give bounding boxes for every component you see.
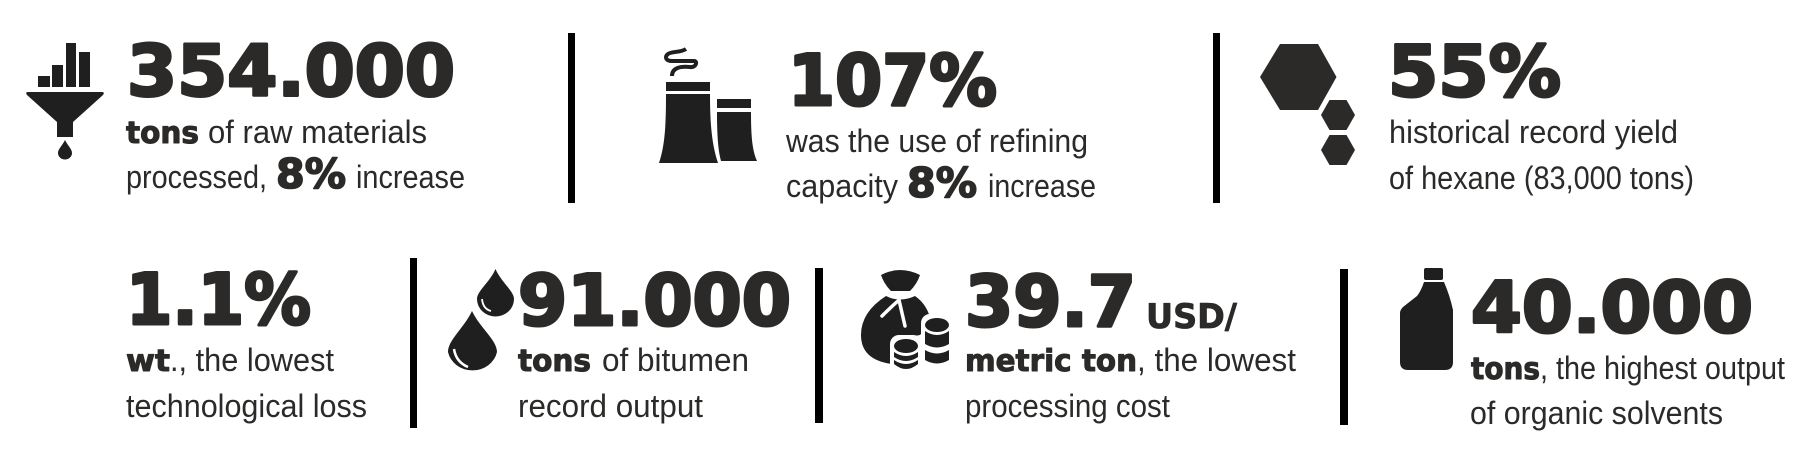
text: metric ton, the lowest processing cost [965, 342, 1296, 424]
text: was the use of refining capacity 8% increase: capacity [786, 168, 898, 204]
text: metric ton, the lowest processing cost: , the lowest [1137, 342, 1296, 378]
panel: technological loss [126, 259, 367, 424]
text: wt., the lowest technological loss [126, 342, 367, 424]
icon: money bag and coins [861, 270, 953, 372]
text: tons of raw materials processed, 8% increase: tons [126, 116, 199, 151]
text: was the use of refining capacity 8% increase: 8% [907, 159, 977, 207]
panel: hexane yield [1260, 31, 1694, 196]
text: tons of bitumen record output: tons [518, 344, 591, 379]
number: 107%: 107% [788, 40, 997, 122]
panel: refining capacity use [659, 40, 1096, 207]
number: 39.7: 39.7 [965, 261, 1136, 343]
text: tons, the highest output of organic solvents: tons [1471, 352, 1540, 387]
text: tons, the highest output of organic solvents: of organic solvents [1470, 395, 1723, 431]
text: wt., the lowest technological loss: technological loss [126, 388, 367, 424]
text: metric ton, the lowest processing cost: processing cost [965, 388, 1170, 424]
text: was the use of refining capacity 8% increase [785, 123, 1096, 207]
label: USD/: USD/ [1146, 297, 1238, 337]
text: historical record yield of hexane: of hexane (83,000 tons) [1389, 160, 1694, 196]
text: tons of raw materials processed, 8% increase: processed, [126, 159, 267, 195]
text: tons of raw materials processed, 8% increase [126, 114, 465, 198]
text: historical record yield of hexane: historical record yield [1389, 114, 1678, 150]
text: wt., the lowest technological loss: wt [126, 344, 170, 379]
panel: organic solvents [1400, 267, 1785, 431]
text: tons of bitumen record output: of bitumen [602, 342, 749, 378]
number: 91.000: 91.000 [518, 260, 791, 342]
text: tons of raw materials processed, 8% increase: increase [356, 159, 465, 195]
number: 40.000: 40.000 [1471, 267, 1753, 349]
text: tons of bitumen record output: record output [518, 388, 703, 424]
text: metric ton, the lowest processing cost: metric ton [965, 344, 1137, 379]
panel: processing cost [861, 261, 1296, 424]
icon: funnel with bars [26, 43, 104, 160]
text: was the use of refining capacity 8% increase: was the use of refining [785, 123, 1088, 159]
text: tons of raw materials processed, 8% increase: 8% [276, 150, 346, 198]
number: 354.000: 354.000 [127, 30, 455, 112]
text: tons, the highest output of organic solvents: , the highest output [1540, 350, 1785, 386]
icon: hexagons [1260, 44, 1355, 165]
text: wt., the lowest technological loss: ., the lowest [170, 342, 334, 378]
text: was the use of refining capacity 8% increase: increase [988, 168, 1096, 204]
icon: bottle [1400, 268, 1453, 370]
text: tons of bitumen record output [518, 342, 749, 424]
panel: bitumen output [448, 260, 791, 424]
text: tons, the highest output of organic solvents [1470, 350, 1785, 431]
number: 55%: 55% [1388, 31, 1561, 113]
panel: raw materials processed [26, 30, 465, 198]
icon: cooling towers [659, 49, 757, 163]
icon: oil drops [448, 269, 514, 370]
number: 1.1%: 1.1% [126, 259, 311, 341]
text: historical record yield of hexane [1389, 114, 1694, 196]
text: tons of raw materials processed, 8% increase: of raw materials [208, 114, 427, 150]
